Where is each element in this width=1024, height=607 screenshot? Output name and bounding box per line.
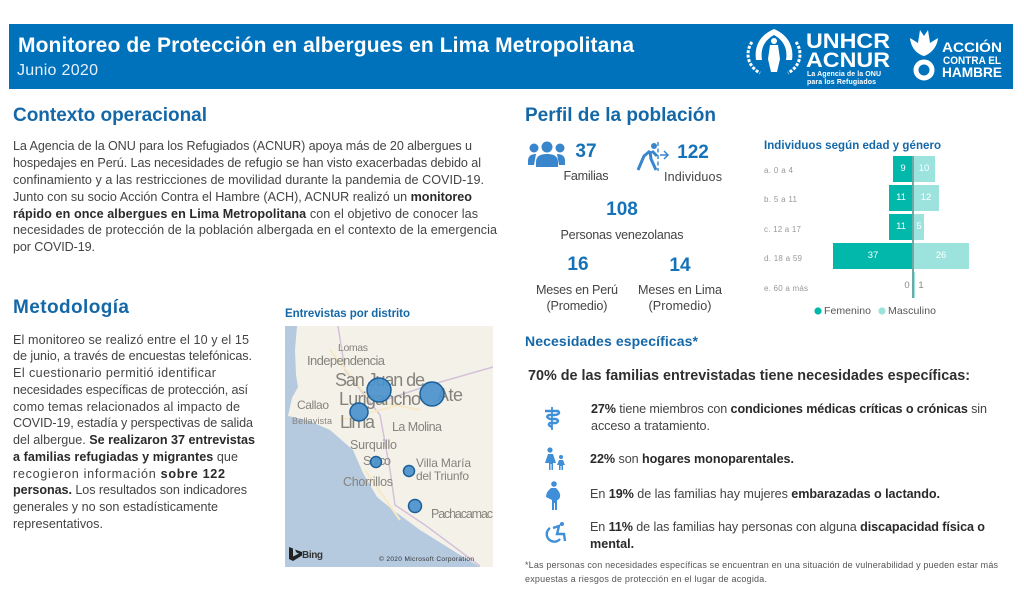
- heading: necesidades: Necesidades específicas*: [525, 333, 699, 349]
- map copyright: © 2020 Microsoft Corporation: [379, 555, 474, 563]
- footnote: [525, 560, 998, 584]
- map: Chorrillos: [343, 475, 393, 489]
- panel: necesidades específicas: [525, 333, 998, 584]
- logo: Acción contra el Hambre: [910, 30, 1002, 80]
- need: embarazadas o lactando: [546, 481, 940, 510]
- panel: perfil de la población: [525, 105, 722, 313]
- bar values: 10: [919, 163, 929, 174]
- icon: medical staff: [545, 407, 559, 430]
- paragraph: metodología: [13, 333, 255, 531]
- paragraph: contexto: Junto con su socio Acción Contra el Hambre (ACH), ACNUR realizó un monitoreo: [13, 190, 472, 204]
- icon: people group: [528, 142, 565, 167]
- map heading: Entrevistas por distrito: [285, 308, 410, 320]
- paragraph: metodología: de junio, a través de encuestas telefónicas.: [13, 349, 252, 363]
- bar chart: individuos según edad y género: [764, 140, 969, 317]
- bar values: 12: [921, 192, 931, 203]
- map: Independencia: [307, 353, 386, 368]
- need: condiciones médicas: acceso a tratamiento.: [591, 419, 710, 433]
- paragraph: contexto: rápido en once albergues en Lima Metropolitana con el objetivo de conocer las: [13, 207, 478, 221]
- male bars: [913, 156, 969, 298]
- age labels: c. 12 a 17: [764, 225, 802, 234]
- map: La Molina: [392, 420, 442, 434]
- paragraph: contexto: confinamiento y a las restricciones de movilidad durante la pandemia de COVID-19.: [13, 173, 484, 187]
- logo: UNHCR ACNUR: [748, 29, 890, 86]
- kpi: personas venezolanas: Personas venezolanas: [560, 228, 684, 242]
- map: San Juan de: [335, 370, 425, 390]
- heading: perfil: Perfil de la población: [525, 105, 716, 126]
- need: discapacidad: En 11% de las familias hay personas con alguna discapacidad física o: [590, 520, 985, 534]
- header banner: [9, 24, 1013, 89]
- age labels: [764, 166, 808, 293]
- bar values: [868, 163, 946, 291]
- logo: Acción contra el Hambre: HAMBRE: [942, 64, 1002, 80]
- logo: UNHCR ACNUR: La Agencia de la ONU: [807, 71, 881, 78]
- title: Monitoreo de Protección en albergues en Lima Metropolitana: [18, 34, 634, 57]
- paragraph: metodología: representativos.: [13, 517, 103, 531]
- logo: Acción contra el Hambre: CONTRA EL: [943, 55, 1001, 67]
- kpi: meses en Lima: 14: [669, 255, 691, 276]
- map: Callao: [297, 398, 329, 412]
- map: Lima: [340, 412, 376, 432]
- bing logo: Bing: [302, 550, 323, 561]
- age labels: b. 5 a 11: [764, 195, 798, 204]
- summary statement: 70% de las familias entrevistadas tiene necesidades específicas:: [528, 368, 970, 384]
- bar values: 26: [936, 250, 946, 261]
- bar values: 0: [904, 280, 910, 291]
- bar values: 37: [868, 250, 878, 261]
- kpi: meses en Lima: Meses en Lima: [638, 283, 722, 297]
- legend: Masculino: [888, 305, 936, 317]
- need: hogares monoparentales: [545, 447, 794, 470]
- paragraph: metodología: El cuestionario permitió identificar: [13, 366, 216, 380]
- paragraph: contexto: La Agencia de la ONU para los Refugiados (ACNUR) apoya más de 20 albergues u: [13, 139, 472, 153]
- map: Villa María: [416, 456, 471, 470]
- age labels: a. 0 a 4: [764, 166, 794, 175]
- subtitle date: Junio 2020: [17, 62, 98, 79]
- panel: mapa de entrevistas: [285, 308, 493, 567]
- paragraph: contexto: por COVID-19.: [13, 240, 95, 254]
- paragraph: metodología: El monitoreo se realizó entre el 10 y el 15: [13, 333, 249, 347]
- need: condiciones médicas: [545, 402, 987, 433]
- bar values: 11: [896, 192, 906, 203]
- heading: contexto: Contexto operacional: [13, 105, 207, 126]
- paragraph: metodología: generales y no son estadísticamente: [13, 500, 218, 514]
- kpi: individuos: Individuos: [664, 170, 722, 184]
- icon: pregnant woman: [546, 481, 560, 510]
- need: embarazadas o lactando: En 19% de las familias hay mujeres embarazadas o lactando.: [590, 487, 940, 501]
- panel: contexto operacional: [13, 105, 497, 254]
- map: Ate: [437, 385, 463, 405]
- paragraph: metodología: necesidades específicas de protección, así: [13, 383, 248, 397]
- paragraph: metodología: del albergue. Se realizaron 37 entrevistas: [13, 433, 255, 447]
- paragraph: contexto: necesidades de protección de la población albergada en el contexto de la emergencia: [13, 223, 497, 237]
- bar values: 1: [918, 280, 924, 291]
- map bubbles: [350, 378, 444, 512]
- kpi: meses en Lima: [638, 255, 722, 313]
- kpi: meses en Perú: (Promedio): [546, 299, 608, 313]
- need: condiciones médicas: 27% tiene miembros con condiciones médicas críticas o crónicas sin: [591, 402, 987, 416]
- need: discapacidad: [547, 520, 985, 551]
- map: Lurigancho: [339, 389, 421, 409]
- logo: Acción contra el Hambre: ACCIÓN: [942, 38, 1002, 55]
- map: Surco: [363, 454, 391, 468]
- age labels: e. 60 a más: [764, 284, 808, 293]
- kpi: familias: 37: [575, 141, 597, 162]
- paragraph: metodología: personas. Los resultados son indicadores: [13, 483, 247, 497]
- logo: UNHCR ACNUR: para los Refugiados: [807, 79, 876, 86]
- kpi: meses en Lima: (Promedio): [648, 299, 712, 313]
- kpi: familias: [528, 141, 608, 183]
- age labels: d. 18 a 59: [764, 254, 803, 263]
- bar values: 11: [896, 221, 906, 232]
- panel: metodología: [13, 297, 255, 531]
- bar values: 9: [900, 163, 906, 174]
- female bars: [833, 156, 913, 269]
- kpi: personas venezolanas: 108: [606, 199, 638, 220]
- paragraph: metodología: COVID-19, estadía y perspectivas de salida: [13, 416, 253, 430]
- paragraph: contexto: hospedajes en Perú. Las necesidades de refugio se han visto exacerbadas debido al: [13, 156, 481, 170]
- map: Lomas: [338, 342, 368, 354]
- footnote: *Las personas con necesidades específicas se encuentran en una situación de vulnerabilidad y pueden estar más: [525, 560, 998, 570]
- kpi: individuos: [638, 142, 722, 184]
- kpi: individuos: 122: [677, 142, 709, 163]
- kpi: personas venezolanas: [560, 199, 684, 242]
- kpi: familias: Familias: [564, 169, 608, 183]
- need: hogares monoparentales: 22% son hogares monoparentales.: [590, 452, 794, 466]
- icon: wheelchair: [547, 522, 565, 542]
- heading: metodología: Metodología: [13, 297, 129, 318]
- logo: UNHCR ACNUR: ACNUR: [806, 49, 890, 72]
- paragraph: metodología: como temas relacionados al impacto de: [13, 400, 240, 414]
- map: del Triunfo: [416, 469, 469, 483]
- kpi: meses en Perú: 16: [567, 254, 589, 275]
- kpi: meses en Perú: Meses en Perú: [536, 283, 618, 297]
- paragraph: contexto: [13, 139, 497, 254]
- logo: UNHCR ACNUR: UNHCR: [806, 30, 890, 53]
- map: [285, 326, 493, 567]
- kpi: meses en Perú: [536, 254, 618, 313]
- chart title: Individuos según edad y género: [764, 140, 941, 152]
- need: discapacidad: mental.: [590, 537, 634, 551]
- bar values: 5: [916, 221, 922, 232]
- bing logo: [289, 547, 323, 561]
- icon: person crossing border: [638, 142, 668, 171]
- legend: Femenino: [824, 305, 871, 317]
- paragraph: metodología: recogieron información sobre 122: [13, 467, 225, 481]
- footnote: expuestas a riesgos de protección en el lugar de acogida.: [525, 574, 767, 584]
- map: Pachacamac: [431, 507, 493, 521]
- icon: parent and child: [545, 447, 565, 470]
- paragraph: metodología: a familias refugiadas y migrantes que: [13, 450, 238, 464]
- map: Surquillo: [350, 438, 397, 452]
- legend: [814, 305, 936, 317]
- map: Bellavista: [292, 416, 332, 426]
